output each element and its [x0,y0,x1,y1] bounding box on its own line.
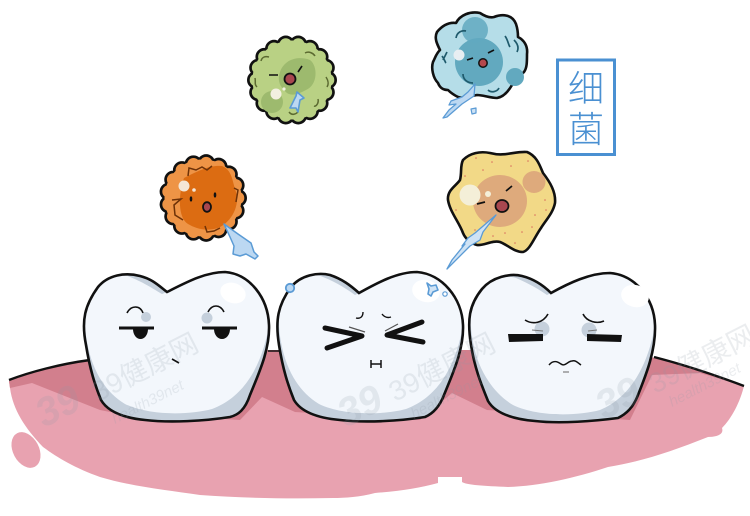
bacterium: yellow [447,152,555,269]
tooth: middle [277,272,463,421]
watermark: right [588,319,750,428]
bacterium: blue cloud [432,12,527,118]
bacterium: green [252,40,332,120]
sweat drop on tooth [427,283,447,296]
label box: 细菌 [558,60,614,154]
face: orange bacterium [190,192,216,212]
watermark: left: health39net [109,376,187,428]
face: green bacterium [269,66,302,84]
face: left tooth [119,306,237,363]
watermark: middle: 39健康网 [384,327,500,407]
tooth highlight [410,277,442,305]
speckles [455,157,547,244]
water spray: yellow [447,215,496,269]
face: right tooth [508,314,622,372]
tooth highlight [217,279,249,307]
watermark: middle: 39 [330,376,390,436]
watermark: left: 39 [28,376,88,436]
blue bubble [286,284,294,292]
tooth: right [469,273,655,422]
gum [0,340,750,498]
watermark: middle [330,327,500,436]
water spray: orange [224,224,258,259]
watermark: middle: health39net [408,371,486,423]
watermark: right: 39 [588,368,648,428]
tooth: left [84,272,269,421]
watermark: right: health39net [666,359,744,411]
water spray: blue [443,84,476,118]
bacterium: orange [164,160,258,259]
tooth highlight [619,282,651,310]
face: yellow bacterium [477,186,512,212]
gum spot [6,427,46,473]
label box: 细菌: 细 [568,68,604,109]
watermark: left: 39健康网 [87,327,203,407]
face: blue bacterium [467,50,494,67]
label box: 细菌: 菌 [568,109,604,150]
face: middle tooth [325,312,423,368]
watermark: left [28,327,203,436]
water spray: green [290,92,304,112]
